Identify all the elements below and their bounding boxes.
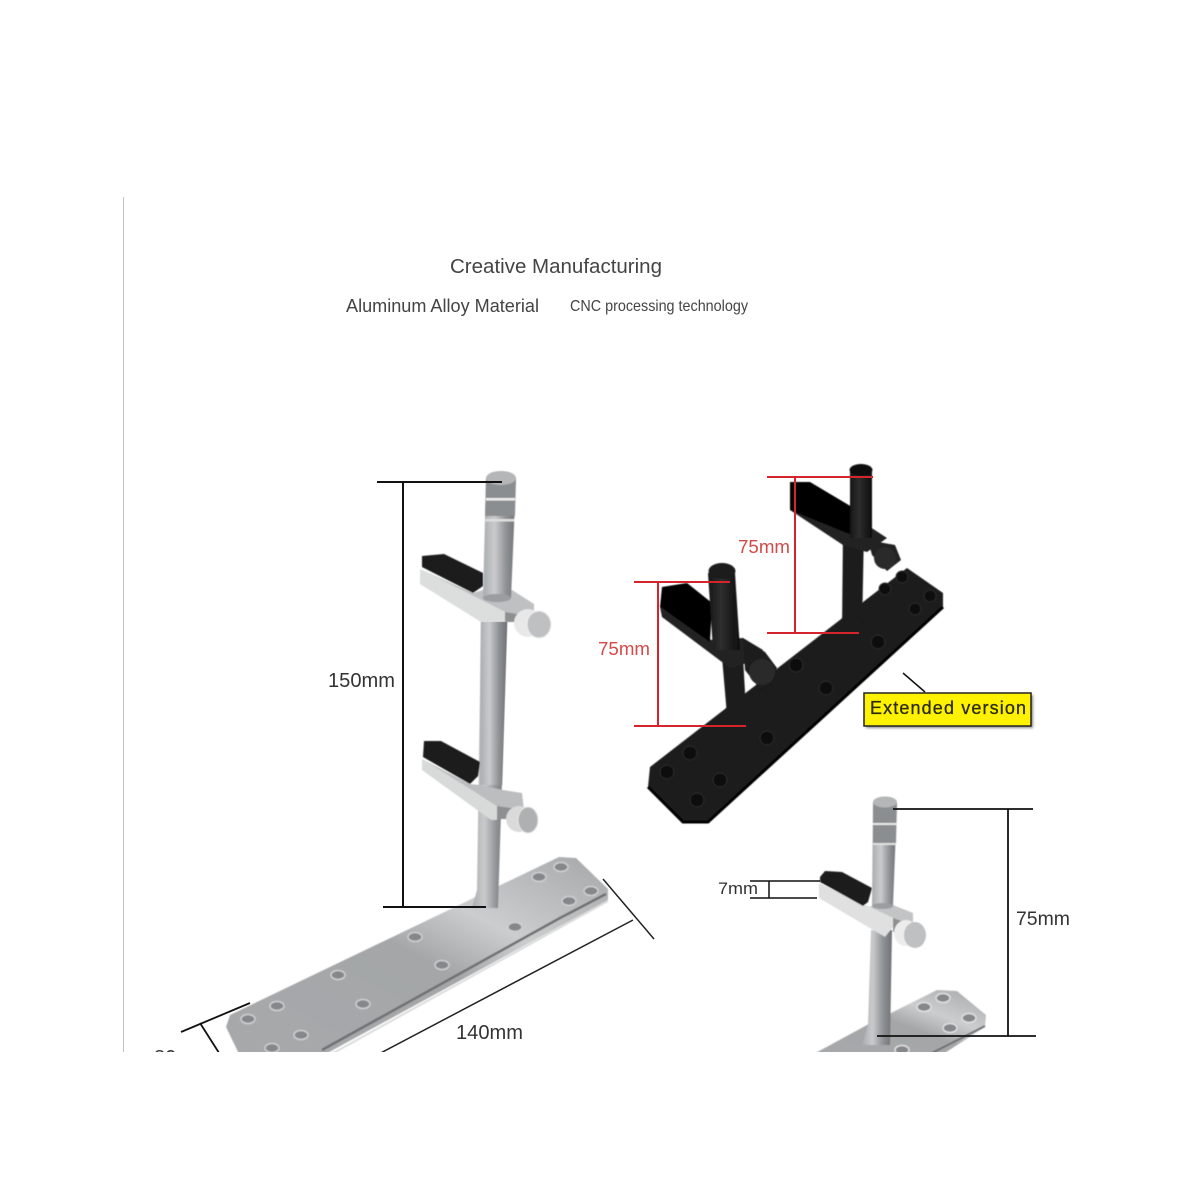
- 140mm dimension: [375, 879, 654, 1056]
- red dimension: front post: [634, 582, 746, 726]
- pole lower part: [472, 622, 507, 908]
- 140mm label: 140mm: [456, 1022, 523, 1044]
- 80mm clipped label: 80 mm: [154, 1047, 215, 1069]
- heading block: [346, 256, 748, 316]
- product images: [154, 464, 1070, 1069]
- panel: silver 150mm stand: [154, 471, 654, 1069]
- callout: extended version: Extended version: [870, 698, 1026, 718]
- rear 75mm label: 75mm: [738, 537, 790, 557]
- left vertical rule: [123, 197, 124, 1052]
- short pole upper part: [872, 796, 897, 909]
- 75mm dimension: [877, 809, 1036, 1036]
- lower clamp: [422, 741, 538, 833]
- 7mm label: 7mm: [718, 879, 758, 898]
- base plate: [226, 857, 608, 1056]
- title: Creative Manufacturing: [450, 256, 662, 278]
- upper clamp: [420, 554, 551, 638]
- front post and clamp: [660, 563, 777, 727]
- panel: black extended version: [598, 464, 1033, 822]
- short pole clamp: [819, 871, 926, 948]
- subtitle: material: Aluminum Alloy Material: [346, 296, 539, 316]
- 80mm dimension: [181, 1003, 250, 1056]
- black base plate: [648, 568, 943, 822]
- rear post and clamp: [790, 464, 901, 630]
- infographic canvas: [123, 197, 1069, 1052]
- small base plate: [810, 990, 986, 1056]
- short pole lower part: [862, 930, 892, 1045]
- front 75mm label: 75mm: [598, 639, 650, 659]
- 75mm label: 75mm: [1016, 909, 1070, 930]
- leader line: [903, 673, 925, 692]
- callout: extended version: [864, 693, 1033, 728]
- 150mm dimension: [377, 482, 502, 907]
- red dimension: rear post: [767, 477, 873, 633]
- pole upper parts: [480, 471, 516, 785]
- panel: silver 75mm stand: [718, 796, 1070, 1056]
- subtitle: process: CNC processing technology: [570, 298, 748, 315]
- 7mm dimension: [750, 881, 820, 898]
- 150mm label: 150mm: [328, 670, 395, 692]
